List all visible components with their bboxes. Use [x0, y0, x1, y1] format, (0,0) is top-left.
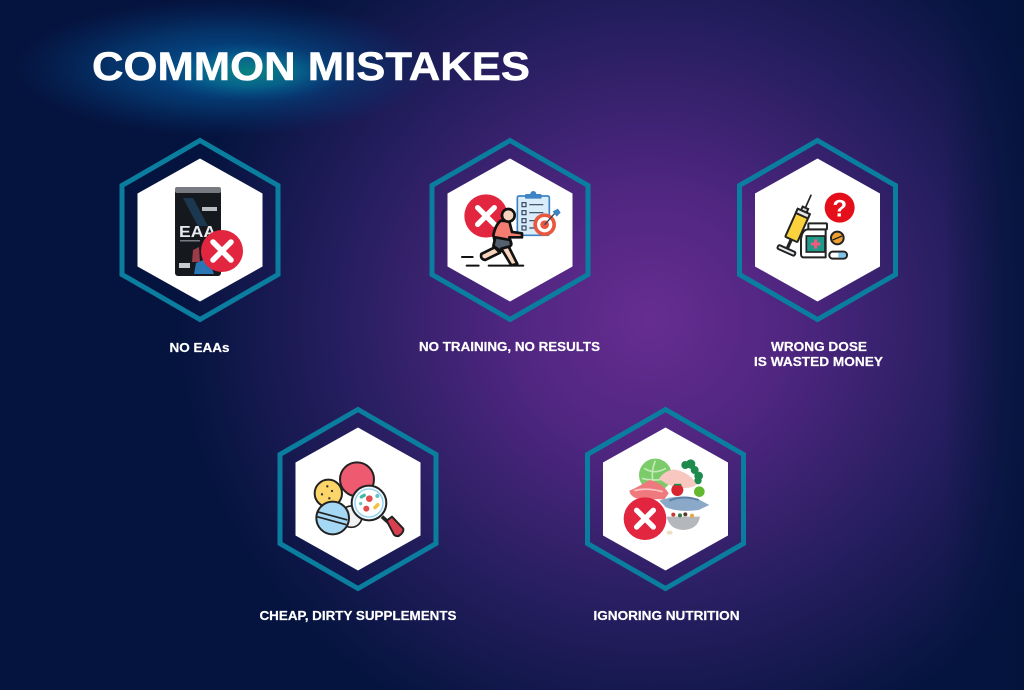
- icon: EAA supplement tub with red cross: [175, 187, 243, 276]
- label: wrong dose: WRONG DOSE: [771, 340, 867, 354]
- panel: ignoring nutrition: [588, 410, 744, 623]
- hexagon frame: wrong dose: [740, 140, 896, 320]
- icon: EAA supplement tub with red cross: EAA: [179, 224, 216, 241]
- label: no EAAs: NO EAAs: [170, 341, 230, 355]
- hexagon frame: no training: [432, 140, 588, 320]
- panel: no EAAs: [122, 140, 278, 355]
- icon: runner, red cross, checklist and target: [462, 191, 561, 266]
- hexagon frame: dirty supplements: [280, 410, 436, 588]
- label: no training: NO TRAINING, NO RESULTS: [419, 340, 600, 354]
- title: COMMON MISTAKES: [92, 45, 530, 89]
- icon: red cross: [201, 230, 243, 272]
- panel: wrong dose: [740, 140, 896, 369]
- icon: syringe, bottle, pills and question mark: ?: [832, 195, 847, 222]
- panel: dirty supplements: [260, 410, 456, 623]
- panel: no training: [419, 140, 600, 354]
- icon: food group with red cross: [624, 459, 709, 540]
- label: dirty supplements: CHEAP, DIRTY SUPPLEMENTS: [260, 609, 456, 623]
- label: wrong dose: IS WASTED MONEY: [754, 355, 884, 369]
- icon: syringe, bottle, pills and question mark: [777, 191, 855, 259]
- hexagon frame: ignoring nutrition: [588, 410, 744, 588]
- label: wrong dose: [754, 340, 884, 369]
- hexagon frame: no EAAs: [122, 140, 278, 320]
- icon: pills under magnifying glass: [315, 462, 403, 536]
- label: ignoring nutrition: IGNORING NUTRITION: [594, 609, 740, 623]
